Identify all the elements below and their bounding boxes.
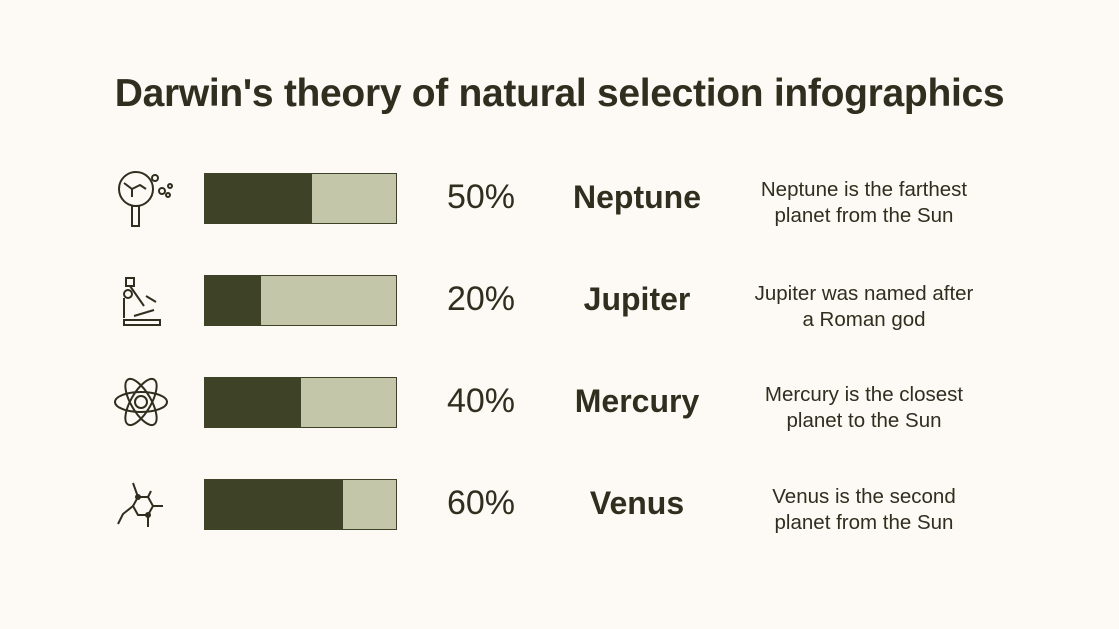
text: Venus is the second [772, 485, 956, 508]
text: Jupiter was named after [755, 282, 973, 305]
text: 60% [447, 484, 515, 522]
text: 40% [447, 382, 515, 420]
icon: molecule [117, 482, 163, 527]
descriptions [761, 178, 967, 227]
text: 20% [447, 280, 515, 318]
text: Jupiter [584, 281, 690, 317]
text: planet to the Sun [786, 409, 942, 432]
text: Mercury [575, 383, 699, 419]
icon: magnifier molecule [118, 171, 173, 227]
icon: atom [114, 378, 168, 426]
names: Neptune [573, 179, 701, 215]
text: a Roman god [802, 308, 926, 331]
descriptions: Neptune is the farthest [761, 178, 967, 201]
row bars [204, 173, 397, 224]
icon: microscope [123, 277, 161, 326]
percentages: 50% [447, 178, 515, 216]
descriptions: planet from the Sun [775, 204, 953, 227]
text: Venus [590, 485, 684, 521]
text: Mercury is the closest [765, 383, 963, 406]
text: planet from the Sun [775, 511, 953, 534]
title: Darwin's theory of natural selection infographics [115, 72, 1004, 115]
